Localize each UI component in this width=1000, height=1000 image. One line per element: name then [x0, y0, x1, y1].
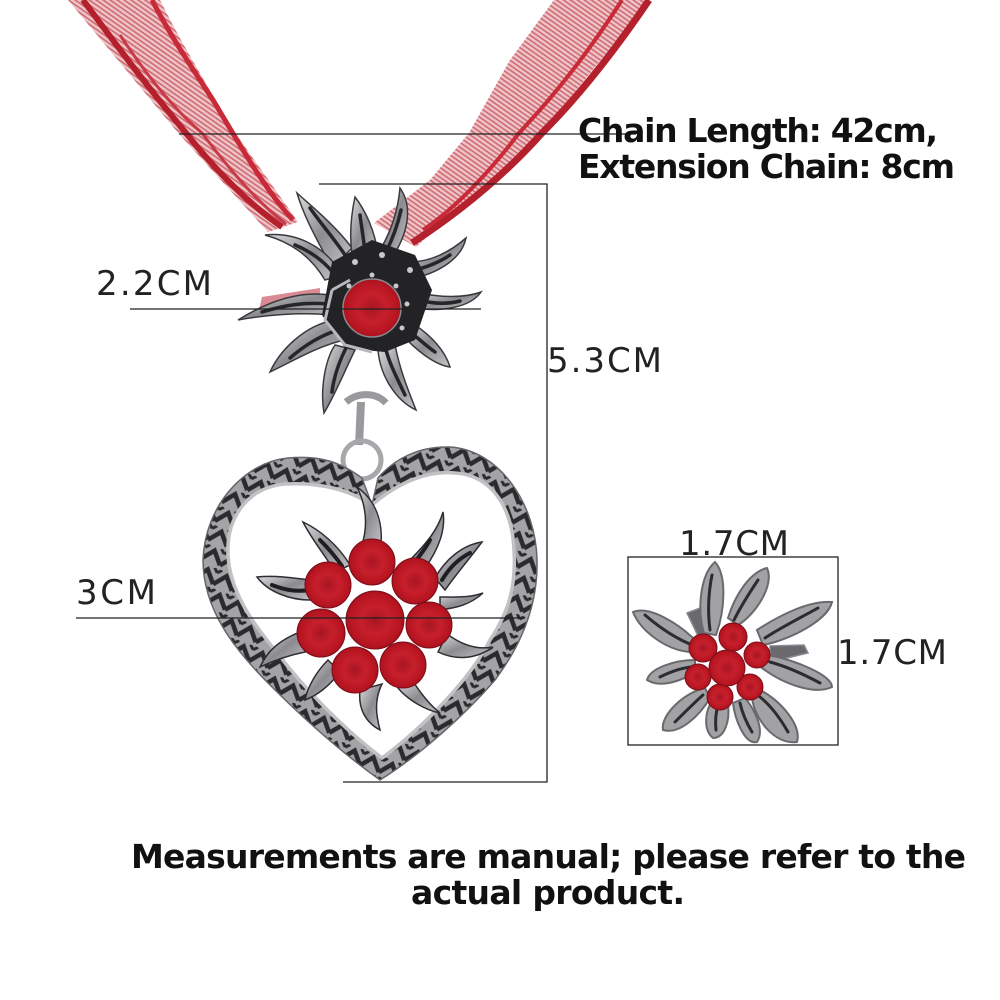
bail link: [343, 395, 386, 479]
label: 3CM: 3CM: [76, 573, 156, 613]
label: 1.7CM right: 1.7CM: [837, 633, 947, 673]
heart frame: [203, 447, 537, 780]
label: 5.3CM: 5.3CM: [547, 341, 662, 381]
petal streaks: [645, 575, 820, 732]
note line two: actual product.: [411, 873, 685, 912]
heart pendant: [203, 447, 537, 780]
small gems: [685, 623, 770, 710]
spike shading: [272, 540, 470, 591]
inner rim: [228, 473, 514, 758]
setting beads: [346, 252, 413, 330]
ribbon necklace: [68, 0, 649, 310]
petals: [633, 562, 832, 742]
stub petals: [687, 608, 808, 662]
note line one: Measurements are manual; please refer to the: [131, 837, 966, 876]
label: chain length: Chain Length: 42cm,: [578, 111, 938, 150]
flower petals: [238, 188, 481, 413]
label: extension chain: Extension Chain: 8cm: [578, 147, 955, 186]
red gems: [297, 539, 452, 693]
petal shading: [262, 208, 460, 395]
small edelweiss piece: [633, 562, 832, 742]
heart flower spikes: [257, 487, 493, 730]
red gem: [343, 279, 401, 337]
small flower pendant: [238, 188, 481, 413]
dimension lines: [76, 134, 838, 782]
flower centre: [322, 240, 432, 352]
label: 2.2CM: 2.2CM: [96, 264, 212, 304]
silver setting outline: [325, 280, 372, 352]
label: 1.7CM top: 1.7CM: [679, 524, 789, 564]
